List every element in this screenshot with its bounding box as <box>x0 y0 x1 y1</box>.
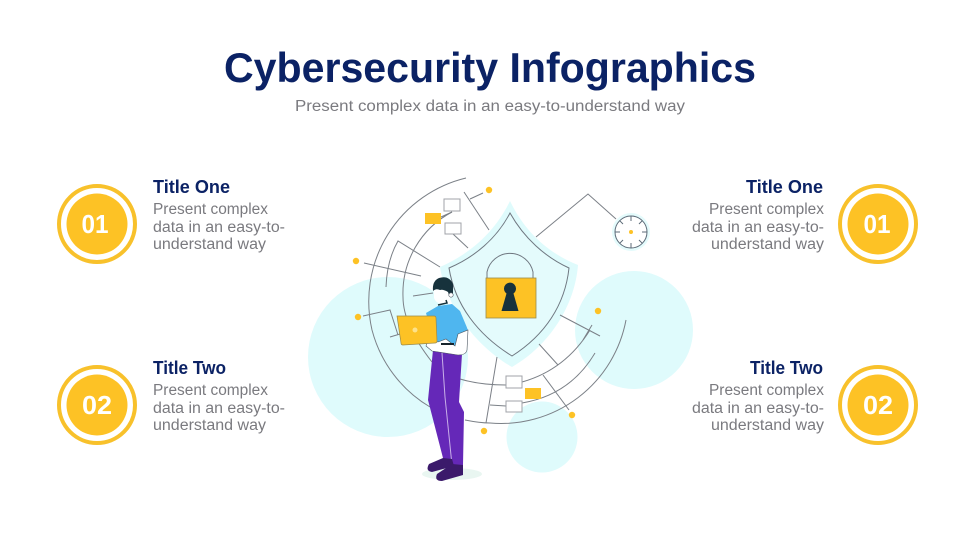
legs <box>428 350 464 465</box>
body text <box>692 382 824 434</box>
title: Cybersecurity Infographics <box>224 44 756 91</box>
icon: clock <box>612 213 650 251</box>
body text <box>153 201 285 253</box>
panel: right 01 <box>692 177 916 262</box>
badge 01 right <box>840 186 916 262</box>
body text: data in an easy-to- <box>692 219 824 236</box>
badge 02 right: 02 <box>863 390 893 420</box>
ground shadow <box>422 468 482 480</box>
heading: Title Two <box>153 358 226 378</box>
body text: data in an easy-to- <box>692 400 824 417</box>
badge 02 left: 02 <box>82 390 112 420</box>
heading: Title One <box>746 177 823 197</box>
head <box>434 288 450 304</box>
background blobs <box>308 271 693 472</box>
body text: data in an easy-to- <box>153 400 285 417</box>
body text: Present complex <box>153 382 268 399</box>
body text: data in an easy-to- <box>153 219 285 236</box>
badge 01 left <box>59 186 135 262</box>
network boxes and folders <box>425 199 541 412</box>
badge 02 right <box>840 367 916 443</box>
yellow nodes <box>353 187 601 434</box>
shield <box>440 201 578 367</box>
body text: Present complex <box>153 201 268 218</box>
panel: right 02 <box>692 358 916 443</box>
body text <box>153 382 285 434</box>
body text: understand way <box>153 236 266 253</box>
circuit lines <box>363 178 626 423</box>
body text: Present complex <box>709 382 824 399</box>
body text: understand way <box>153 417 266 434</box>
heading: Title Two <box>750 358 823 378</box>
central illustration <box>308 178 693 481</box>
subtitle: Present complex data in an easy-to-understand way <box>295 98 685 115</box>
panel: left 02 <box>59 358 285 443</box>
laptop <box>397 316 437 345</box>
badge 01 left: 01 <box>82 209 108 239</box>
body text: understand way <box>711 417 824 434</box>
heading: Title One <box>153 177 230 197</box>
panel: left 01 <box>59 177 285 262</box>
body text: understand way <box>711 236 824 253</box>
icon: padlock <box>486 253 536 318</box>
arm <box>426 330 468 355</box>
body text <box>692 201 824 253</box>
person <box>397 277 482 481</box>
badge 01 right: 01 <box>864 209 890 239</box>
shoes <box>428 458 454 472</box>
body text: Present complex <box>709 201 824 218</box>
shirt <box>426 304 468 350</box>
badge 02 left <box>59 367 135 443</box>
